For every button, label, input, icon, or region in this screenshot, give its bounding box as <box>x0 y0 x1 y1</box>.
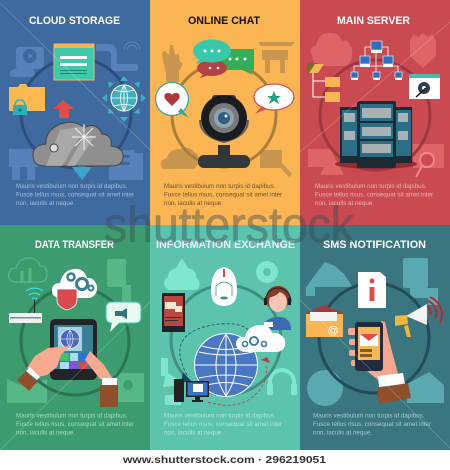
ring <box>319 283 429 393</box>
icon: globe <box>194 334 258 396</box>
panel: main server <box>300 0 450 225</box>
icon: gears cloud <box>52 269 97 298</box>
icon: locked folder <box>9 84 45 115</box>
panel: data transfer <box>0 225 150 450</box>
arrows: exchange <box>180 324 270 405</box>
body text: non, iaculis at neque. <box>164 200 223 207</box>
ring <box>21 58 131 168</box>
panel: information exchange <box>150 225 300 450</box>
footer: www.shutterstock.com · 296219051 <box>122 454 326 466</box>
body text: Mauris vestibulum non turpis id dapibus. <box>315 183 427 190</box>
icon: smartphone <box>162 293 185 332</box>
ring <box>21 287 129 395</box>
icon: megaphone bubble <box>106 302 141 332</box>
icon: blue down arrow <box>72 160 92 180</box>
body text: Mauris vestibulum non turpis id dapibus. <box>313 412 425 420</box>
icon: login window <box>54 44 94 80</box>
icon: email envelope <box>306 305 343 337</box>
icon: shield <box>57 289 77 310</box>
icon: webcam <box>198 95 250 168</box>
body text: Fusce tellus risus, consequat sit amet inter <box>313 421 431 428</box>
icon: settings window <box>409 74 440 99</box>
heading: data transfer: DATA TRANSFER <box>35 239 114 251</box>
icon: hand with smartphone <box>348 321 411 404</box>
background icons <box>306 258 444 406</box>
ring <box>172 63 276 167</box>
icon: support agent <box>263 286 291 330</box>
body text: Fusce tellus risus, consequat sit amet inter <box>16 192 134 198</box>
heading: main server: MAIN SERVER <box>337 15 410 27</box>
body text: non, iaculis at neque. <box>315 200 374 207</box>
heading: information exchange: INFORMATION EXCHANGE <box>156 239 295 251</box>
icon: desktop computer <box>174 379 209 402</box>
icon: cloud safe <box>33 122 123 166</box>
icon: megaphone <box>395 297 442 337</box>
body text: non, iaculis at neque. <box>313 430 372 436</box>
body text: Mauris vestibulum non turpis id dapibus. <box>16 183 128 190</box>
icon: info sheet <box>358 272 386 308</box>
background icons <box>161 258 297 405</box>
body text: Fusce tellus risus, consequat sit amet inter <box>164 421 282 428</box>
icon: star bubble <box>254 84 294 114</box>
body text: non, iaculis at neque. <box>16 430 75 436</box>
background icons <box>161 42 295 177</box>
body text: non, iaculis at neque. <box>164 430 223 436</box>
body text: Mauris vestibulum non turpis id dapibus. <box>16 412 128 420</box>
ring <box>320 60 430 170</box>
icon: server racks <box>335 101 417 169</box>
icon: tablet with hands <box>17 319 118 407</box>
background icons <box>308 33 444 177</box>
icon: network tree <box>351 41 402 80</box>
body text: non, iaculis at neque. <box>16 200 75 207</box>
watermark: shutterstock <box>104 197 355 253</box>
panel: cloud storage <box>0 0 150 225</box>
panel: online chat <box>150 0 300 225</box>
body text: Fusce tellus risus, consequat sit amet inter <box>164 192 282 198</box>
heading: online chat: ONLINE CHAT <box>188 15 260 27</box>
body text: Fusce tellus risus, consequat sit amet inter <box>315 192 433 198</box>
heading: sms notification: SMS NOTIFICATION <box>323 239 426 251</box>
panel: sms notification <box>300 225 450 450</box>
heading: cloud storage: CLOUD STORAGE <box>29 15 120 27</box>
icon: heart bubble <box>156 82 189 118</box>
ring <box>171 285 281 395</box>
icon: folder tree <box>307 63 340 102</box>
background icons <box>7 258 144 403</box>
icon: computer mouse <box>211 267 237 306</box>
icon: network globe <box>102 76 146 122</box>
background icons <box>9 42 143 180</box>
icon: email envelope: @ <box>327 325 339 337</box>
body text: Fusce tellus risus, consequat sit amet inter <box>16 421 134 428</box>
icon: gears cloud <box>236 325 285 352</box>
icon: chat bubbles <box>193 40 254 78</box>
icon: wifi router <box>9 288 43 323</box>
body text: Mauris vestibulum non turpis id dapibus. <box>164 412 276 420</box>
icon: red up arrow <box>53 100 74 118</box>
body text: Mauris vestibulum non turpis id dapibus. <box>164 183 276 190</box>
